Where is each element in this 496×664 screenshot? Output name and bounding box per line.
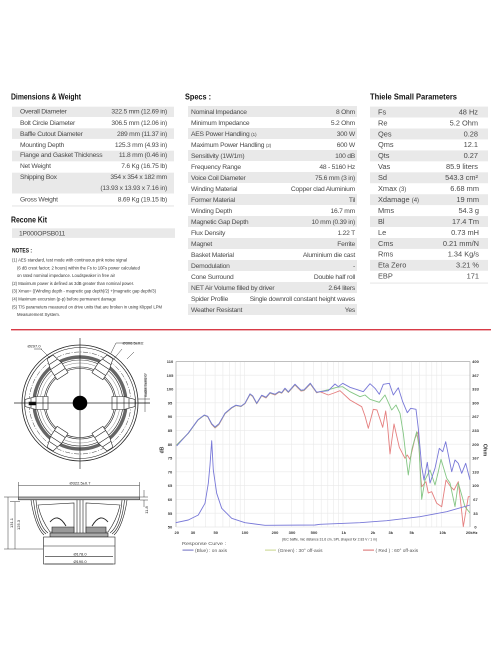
panel: thiele small table: 171: [467, 272, 479, 281]
axis: ohm labels: 233: [472, 428, 480, 433]
axis title: ohm: Ohm: [482, 444, 488, 456]
panel: thiele small table: 48 Hz: [459, 107, 478, 116]
heading: specs: Specs :: [185, 92, 211, 102]
chart: frequency response: [160, 359, 488, 535]
axis: ohm labels: 300: [472, 400, 480, 405]
panel: dimensions table: Baffle Cutout Diameter: [20, 131, 84, 138]
heading: thiele small parameters: Thiele Small Parameters: [370, 92, 457, 102]
axis: dB labels: 95: [168, 400, 173, 405]
curve: green 30 degree off-axis: [177, 384, 470, 513]
axis: frequency labels: 500: [311, 530, 318, 535]
panel: specs table: Maximum Power Handling (2): [191, 142, 272, 149]
axis: frequency labels: [174, 530, 477, 535]
panel: specs table: 75.6 mm (3 in): [315, 175, 355, 182]
panel: dimensions table: 11.8 mm (0.46 in): [119, 152, 167, 159]
panel: specs table: Frequency Range: [191, 164, 241, 171]
panel: thiele small table: 0.73 mH: [451, 228, 479, 237]
panel: thiele small table: 85.9 liters: [446, 162, 478, 171]
axis: dB labels: 65: [168, 483, 173, 488]
panel: dimensions table: Net Weight: [20, 163, 51, 170]
text block: notes: (1) AES standard, test mode with continuous pink noise signal: [12, 258, 127, 263]
panel: thiele small table: Qes: [378, 129, 392, 138]
axis: ohm labels: 400: [472, 359, 480, 364]
panel: specs table: 1.22 T: [337, 230, 355, 237]
panel: thiele small table: 5.2 Ohm: [450, 118, 478, 127]
axis: dB labels: 60: [168, 497, 173, 502]
panel: thiele small table: 19 mm: [456, 195, 479, 204]
panel: thiele small table: 54.3 g: [458, 206, 479, 215]
panel: thiele small table: Fs: [378, 107, 387, 116]
panel: specs table: Minimum Impedance: [191, 120, 250, 127]
axis title: dB: dB: [160, 446, 166, 453]
panel: thiele small table: [370, 107, 488, 284]
curve: blue on-axis: [177, 383, 470, 483]
axis: dB labels: 85: [168, 428, 173, 433]
curve: red 60 degree off-axis: [177, 384, 470, 527]
legend: (Blue) : on axis: [195, 548, 228, 554]
drawing labels: front view: 6xØ8.5x60.0°: [143, 372, 148, 397]
text block: notes: on rated nominal impedance. Loudspeaker in free air: [17, 273, 115, 278]
axis: frequency labels: 20kHz: [466, 530, 477, 535]
panel: dimensions table: Bolt Circle Diameter: [20, 120, 76, 127]
panel: dimensions table: 7.6 Kg (16.75 lb): [121, 163, 167, 170]
panel: dimensions table: 354 x 354 x 182 mm: [110, 174, 168, 181]
text block: notes: [12, 258, 162, 317]
panel: thiele small table: 0.27: [464, 151, 478, 160]
panel: specs table: Winding Material: [191, 186, 238, 193]
panel: specs table: Copper clad Aluminium: [291, 186, 356, 193]
axis: dB labels: [167, 359, 174, 530]
axis: ohm labels: [472, 359, 480, 530]
panel: specs table: 8 Ohm: [336, 109, 356, 116]
axis: frequency labels: 30: [191, 530, 196, 535]
panel: specs table: Ferrite: [337, 241, 355, 248]
panel: thiele small table: 1.34 Kg/s: [448, 250, 479, 259]
panel: thiele small table: Eta Zero: [378, 261, 406, 270]
axis: dB labels: 55: [168, 511, 173, 516]
text block: notes: (2) Maximum power is defined as 3dB greater than nominal power.: [12, 281, 134, 286]
panel: thiele small table: 3.21 %: [456, 261, 479, 270]
panel: thiele small table: Qms: [378, 140, 394, 149]
axis: dB labels: 70: [168, 469, 173, 474]
panel: thiele small table: Bl: [378, 217, 385, 226]
axis: frequency labels: 2k: [371, 530, 376, 535]
drawing labels: side view: 11.8: [144, 505, 149, 514]
recone kit value: [12, 228, 175, 238]
panel: dimensions table: Flange and Gasket Thickness: [20, 152, 103, 159]
chart caption: (IEC baffle, mic distance 31.6 cm, SPL shaped for 2.83 V / 1 m): [282, 538, 377, 542]
axis: ohm labels: 167: [472, 456, 480, 461]
axis: dB labels: 110: [167, 359, 174, 364]
axis: dB labels: 105: [167, 373, 174, 378]
drawing labels: side view: 125.3: [16, 519, 21, 530]
panel: thiele small table: Xmax (3): [378, 184, 406, 193]
panel: dimensions table: [12, 107, 174, 207]
panel: dimensions table: 289 mm (11.37 in): [117, 131, 167, 138]
legend: (Green) : 30° off-axis: [278, 548, 323, 554]
panel: specs table: Single downroll constant height waves: [250, 296, 356, 303]
panel: specs table: 48 - 5160 Hz: [319, 164, 356, 171]
panel: dimensions table: 306.5 mm (12.06 in): [111, 120, 167, 127]
panel: dimensions table: Gross Weight: [20, 196, 58, 204]
panel: specs table: NET Air Volume filled by driver: [191, 285, 275, 292]
panel: specs table: Weather Resistant: [191, 307, 243, 314]
panel: dimensions table: Overall Diameter: [20, 108, 68, 116]
heading: dimensions and weight: Dimensions & Weight: [11, 92, 81, 102]
panel: specs table: Demodulation: [191, 263, 230, 270]
panel: specs table: [188, 106, 357, 315]
axis: frequency labels: 100: [242, 530, 249, 535]
panel: thiele small table: 0.21 mm/N: [443, 239, 479, 248]
panel: thiele small table: Vas: [378, 162, 390, 171]
axis: ohm labels: 333: [472, 387, 480, 392]
panel: specs table: 300 W: [337, 131, 356, 138]
panel: dimensions table: 8.69 Kg (19.15 lb): [118, 196, 167, 204]
panel: specs table: Former Material: [191, 197, 236, 204]
panel: dimensions table: Shipping Box: [20, 174, 58, 181]
drawing labels: front view: Ø297.0: [27, 344, 41, 348]
panel: specs table: Sensitivity (1W/1m): [191, 153, 244, 160]
panel: specs table: 2.64 liters: [328, 285, 356, 292]
drawing labels: side view: 131.1: [9, 517, 14, 528]
text block: notes: (4) Maximum excursion (p-p) before permanent damage: [12, 297, 116, 302]
panel: specs table: Double half roll: [314, 274, 356, 281]
panel: specs table: Cone Surround: [191, 274, 234, 281]
panel: thiele small table: Cms: [378, 239, 393, 248]
axis: dB labels: 80: [168, 442, 173, 447]
drawing labels: side view: Ø322.5±0.7: [70, 480, 91, 486]
red divider: [11, 329, 491, 330]
axis: frequency labels: 300: [289, 530, 296, 535]
panel: specs table: 10 mm (0.39 in): [311, 219, 355, 226]
panel: specs table: Til: [349, 197, 356, 204]
axis: frequency labels: 10k: [439, 530, 447, 535]
panel: thiele small table: Sd: [378, 173, 387, 182]
legend: [182, 541, 419, 554]
panel: specs table: Basket Material: [191, 252, 235, 259]
panel: specs table: 600 W: [337, 142, 356, 149]
panel: thiele small table: Mms: [378, 206, 394, 215]
panel: thiele small table: Re: [378, 118, 387, 127]
panel: thiele small table: Rms: [378, 250, 393, 259]
panel: specs table: Nominal Impedance: [191, 109, 247, 116]
axis: frequency labels: 20: [174, 530, 180, 535]
panel: specs table: Voice Coil Diameter: [191, 175, 247, 182]
axis: frequency labels: 5k: [409, 530, 415, 535]
panel: thiele small table: 0.28: [464, 129, 478, 138]
panel: thiele small table: 543.3 cm²: [445, 173, 479, 182]
recone kit value: 1P000OPSB011: [19, 231, 65, 238]
axis: dB labels: 100: [167, 387, 174, 392]
panel: dimensions table: 322.5 mm (12.69 in): [111, 108, 167, 116]
axis: ohm labels: 33: [473, 511, 478, 516]
drawing: speaker front view: [14, 338, 150, 469]
panel: specs table: Spider Profile: [191, 296, 229, 303]
legend: ( Red ) : 60° off-axis: [376, 548, 419, 554]
panel: specs table: Yes: [345, 307, 356, 314]
axis: ohm labels: 133: [472, 469, 480, 474]
heading: recone kit: Recone Kit: [11, 216, 47, 225]
panel: thiele small table: Qts: [378, 151, 390, 160]
drawing: speaker side view: [4, 482, 148, 564]
panel: specs table: 100 dB: [335, 153, 356, 160]
panel: thiele small table: EBP: [378, 272, 393, 281]
panel: specs table: 16.7 mm: [331, 208, 356, 215]
curve: impedance: [176, 441, 470, 525]
axis: frequency labels: 200: [272, 530, 279, 535]
axis: ohm labels: 100: [472, 483, 480, 488]
panel: thiele small table: 17.4 Tm: [452, 217, 479, 226]
legend: Response Curve :: [182, 541, 226, 547]
panel: specs table: AES Power Handling (1): [191, 131, 257, 138]
panel: dimensions table: Mounting Depth: [20, 142, 65, 149]
axis: ohm labels: 367: [472, 373, 480, 378]
panel: specs table: Winding Depth: [191, 208, 233, 215]
panel: specs table: Magnetic Gap Depth: [191, 219, 249, 226]
panel: thiele small table: Xdamage (4): [378, 195, 419, 204]
axis: ohm labels: 67: [473, 497, 478, 502]
panel: specs table: -: [353, 263, 355, 270]
axis: ohm labels: 200: [472, 442, 480, 447]
axis: frequency labels: 50: [213, 530, 219, 535]
panel: thiele small table: Le: [378, 228, 386, 237]
text block: notes: Measurement System.: [17, 312, 60, 317]
drawing labels: side view: Ø178.0: [73, 552, 87, 556]
drawing labels: side view: Ø190.0: [73, 559, 87, 564]
axis: dB labels: 75: [168, 456, 173, 461]
text block: notes: (6 dB crest factor; 2 hours) within the Fs to 10Fs power calculated: [17, 265, 140, 270]
panel: dimensions table: 125.3 mm (4.93 in): [115, 142, 167, 149]
drawing labels: front view: [27, 340, 148, 397]
axis: ohm labels: 0: [474, 525, 477, 530]
panel: thiele small table: 12.1: [464, 140, 478, 149]
panel: specs table: Aluminium die cast: [303, 252, 355, 259]
drawing labels: front view: Ø306.5±0.2: [123, 340, 144, 346]
panel: specs table: Flux Density: [191, 230, 226, 237]
panel: specs table: Magnet: [191, 241, 212, 248]
axis: ohm labels: 267: [472, 414, 480, 419]
panel: dimensions table: (13.93 x 13.93 x 7.16 in): [100, 185, 167, 192]
axis: frequency labels: 1k: [341, 530, 347, 535]
text block: notes: (5) T/S parameters measured on drive units that are broken in using Klippel LPM: [12, 304, 162, 309]
heading: notes: NOTES :: [12, 249, 32, 255]
axis: frequency labels: 3k: [388, 530, 394, 535]
panel: specs table: 5.2 Ohm: [331, 120, 356, 127]
text block: notes: (3) Xmax= ((Winding depth - magnetic gap depth)/2) +(magnetic gap depth/3): [12, 289, 156, 294]
panel: thiele small table: 6.68 mm: [450, 184, 479, 193]
drawing labels: side view: [9, 480, 149, 564]
axis: dB labels: 50: [168, 525, 173, 530]
axis: dB labels: 90: [168, 414, 173, 419]
